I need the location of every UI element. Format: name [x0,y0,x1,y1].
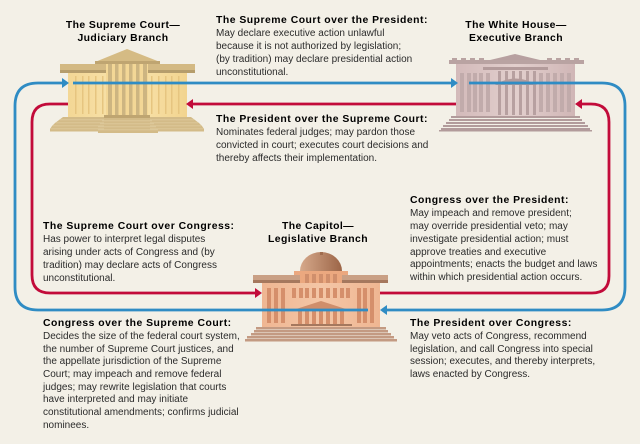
label: Capitol [268,221,368,245]
text: Congress over the President: May impeach and remove president; [410,208,572,219]
text: The President over the Supreme Court [216,114,428,164]
label: White House [465,20,567,44]
label: Capitol: The Capitol— [282,221,354,232]
text: Congress over the Supreme Court [42,318,240,431]
label: White House: The White House— [465,20,567,31]
arrow: President over Congress [380,83,625,315]
arrow: Supreme Court over the President [73,78,458,88]
text: Congress over the Supreme Court: have interpreted and may initiate [43,394,189,405]
text: The President over the Supreme Court: convicted in court; executes court decisions and [216,140,428,151]
text: The Supreme Court over the President: May declare executive action unlawful [216,28,384,39]
text: The Supreme Court over the President: The Supreme Court over the President: [216,15,428,26]
label: Supreme Court [66,20,180,44]
text: The Supreme Court over the President: unconstitutional. [216,67,288,78]
text: The President over Congress: laws enacted by Congress. [410,369,530,380]
text: Congress over the Supreme Court: judges; may rewrite legislation that courts [42,382,226,393]
text: Congress over the Supreme Court: constitutional amendments; confirms judicial [43,407,239,418]
text: Congress over the Supreme Court: Decides the size of the federal court system, [43,331,240,342]
text: Congress over the President: may override presidential veto; may [410,221,568,232]
text: Congress over the President: investigate presidential action; must [410,234,569,245]
text: The Supreme Court over Congress: unconstitutional. [43,273,115,284]
text: Congress over the President [409,195,597,283]
text: Congress over the Supreme Court: nominees. [43,420,89,431]
building: White House [439,54,592,132]
text: Congress over the President: Congress over the President: [410,195,569,206]
text: The Supreme Court over Congress [43,221,235,284]
text: Congress over the President: within which presidential action occurs. [409,272,582,283]
building: Capitol [245,252,397,342]
text: The Supreme Court over the President [216,15,428,78]
label: Supreme Court: The Supreme Court— [66,20,180,31]
text: Congress over the Supreme Court: Court; may impeach and remove federal [43,369,221,380]
arrow: Supreme Court over Congress [32,104,262,298]
label: White House: Executive Branch [469,33,563,44]
text: The Supreme Court over the President: (by tradition) may declare presidential action [216,54,412,65]
text: The Supreme Court over Congress: tradition) may declare acts of Congress [43,260,217,271]
text: The President over Congress: The President over Congress: [410,318,572,329]
text: The President over Congress: May veto acts of Congress, recommend [410,331,587,342]
label: Supreme Court: Judiciary Branch [77,33,169,44]
text: The Supreme Court over the President: because it is not authorized by legislation; [216,41,401,52]
text: The Supreme Court over Congress: arising under acts of Congress and (by [43,247,215,258]
text: Congress over the Supreme Court: Congress over the Supreme Court: [43,318,232,329]
text: The President over Congress: legislation, and call Congress into special [410,344,593,355]
text: The Supreme Court over Congress: Has power to interpret legal disputes [43,234,205,245]
arrow: Congress over the President [380,99,609,293]
text: The President over the Supreme Court: The President over the Supreme Court: [216,114,428,125]
text: The President over the Supreme Court: thereby affects their implementation. [216,153,377,164]
text: Congress over the Supreme Court: the appellate jurisdiction of the Supreme [43,356,222,367]
text: Congress over the Supreme Court: the number of Supreme Court justices, and [43,344,234,355]
text: The Supreme Court over Congress: The Supreme Court over Congress: [43,221,235,232]
text: Congress over the President: appointments; enacts the budget and laws [410,259,597,270]
text: The President over the Supreme Court: Nominates federal judges; may pardon those [216,127,415,138]
arrow: Congress over the Supreme Court [15,78,368,310]
label: Capitol: Legislative Branch [268,234,368,245]
building: Supreme Court [50,49,204,133]
arrow: President over the Supreme Court [186,99,456,109]
text: The President over Congress: session; executes, and thereby interprets, [410,356,595,367]
text: The President over Congress [410,318,595,380]
text: Congress over the President: approve treaties and executive [410,247,547,258]
